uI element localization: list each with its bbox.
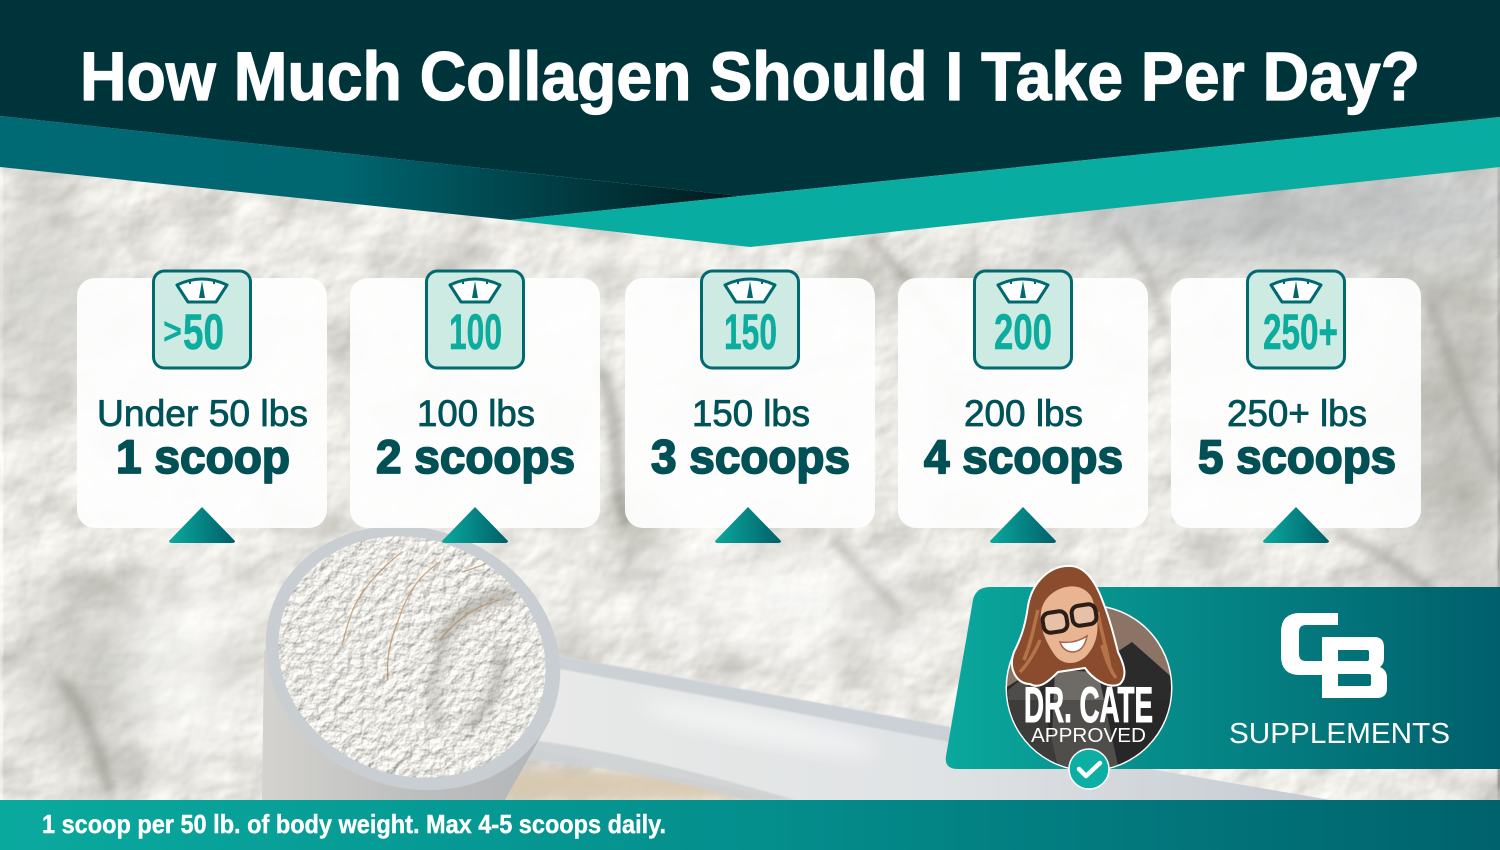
badge: Dr. Cate approved: APPROVED	[1031, 725, 1146, 747]
portrait: hair	[1012, 566, 1124, 686]
scoop count: 5 scoops	[1198, 430, 1396, 483]
icon: scale 200	[974, 271, 1072, 368]
weight label: Under 50 lbs	[97, 393, 308, 434]
icon: scale 250+: 250+	[1263, 304, 1338, 360]
arrow	[990, 507, 1056, 543]
header: left teal ribbon	[0, 116, 740, 220]
portrait: smile	[1060, 636, 1087, 652]
footer band	[0, 800, 1500, 850]
icon: scale >50	[154, 271, 250, 368]
weight label: 150 lbs	[692, 393, 810, 434]
icon: scale 250+	[1248, 271, 1344, 368]
scoop count: 2 scoops	[376, 430, 575, 483]
logo: CB Supplements: SUPPLEMENTS	[1229, 718, 1450, 750]
icon: scale >50: 50	[183, 304, 224, 360]
arrow	[715, 507, 781, 543]
title: How Much Collagen Should I Take Per Day?	[80, 38, 1420, 115]
panel: brand logo banner	[946, 587, 1500, 769]
icon: scale 100	[426, 271, 524, 368]
measuring scoop bowl	[262, 528, 560, 800]
arrow	[1263, 507, 1329, 543]
scoop count: 4 scoops	[924, 430, 1123, 483]
panel: 150 lbs	[625, 271, 875, 543]
header: right teal ribbon	[510, 117, 1500, 247]
icon: scale 200: 200	[994, 304, 1052, 360]
panel: 250+ lbs	[1171, 271, 1421, 543]
icon: check badge	[1069, 749, 1109, 789]
scoop count: 3 scoops	[651, 430, 850, 483]
arrow	[442, 507, 508, 543]
panel: 200 lbs	[898, 271, 1148, 543]
panel: under 50 lbs	[77, 271, 327, 543]
scoop handle	[530, 654, 1330, 800]
scoop count: 1 scoop	[116, 430, 290, 483]
panel: 100 lbs	[350, 271, 600, 543]
weight label: 250+ lbs	[1227, 393, 1367, 434]
badge text: DR. CATE	[1024, 677, 1153, 733]
footer note: 1 scoop per 50 lb. of body weight. Max 4-5 scoops daily.	[42, 809, 666, 839]
arrow	[169, 507, 235, 543]
icon: CB mark	[1281, 613, 1387, 698]
weight label: 200 lbs	[964, 393, 1083, 434]
icon: scale 150: 150	[724, 304, 777, 360]
logo: CB Supplements	[1229, 613, 1450, 750]
weight label: 100 lbs	[417, 393, 535, 434]
icon: scale 100: 100	[449, 304, 502, 360]
badge: Dr. Cate approved	[1000, 566, 1180, 789]
portrait: glasses	[1042, 603, 1097, 634]
portrait: face	[1041, 586, 1098, 663]
icon: scale 150	[702, 271, 798, 368]
icon: scale >50: >	[163, 311, 182, 353]
header: dark title band	[0, 0, 1500, 247]
